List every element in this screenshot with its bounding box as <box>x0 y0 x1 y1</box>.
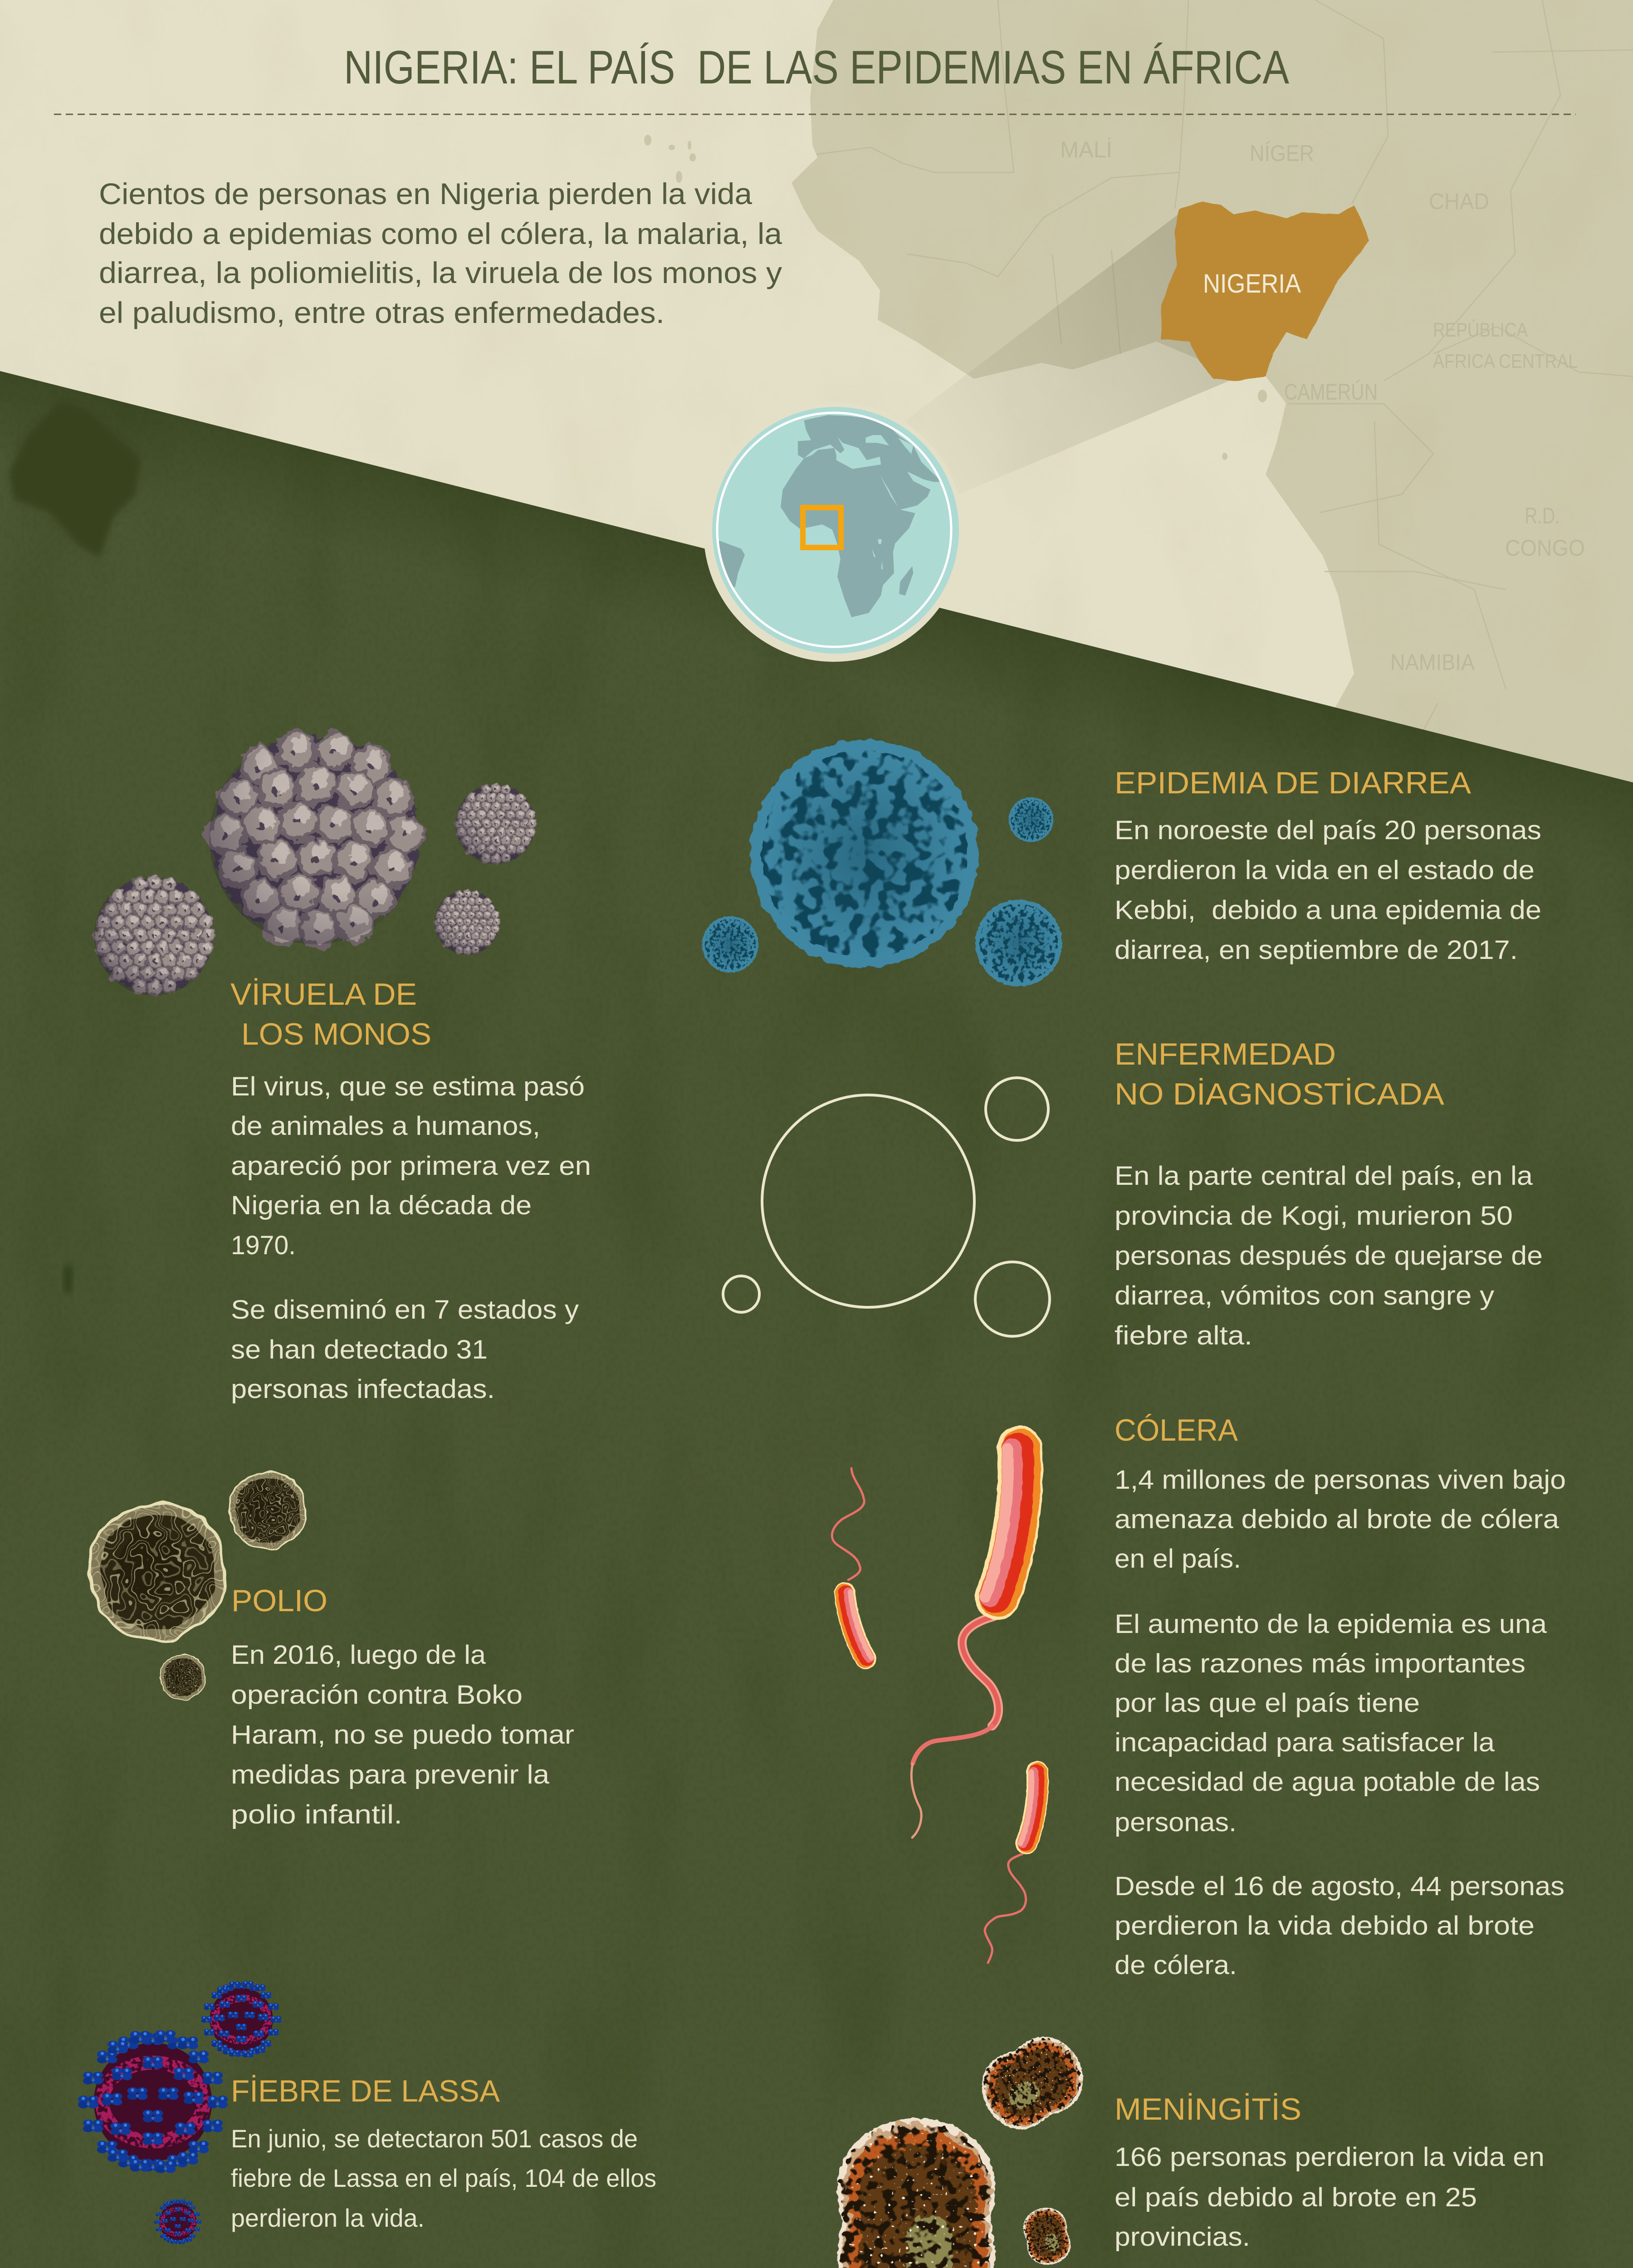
body text: Haram, no se puedo tomar <box>231 1720 574 1750</box>
body text: necesidad de agua potable de las <box>1115 1767 1540 1797</box>
body text: Kebbi, debido a una epidemia de <box>1115 895 1541 925</box>
body text: de cólera. <box>1115 1950 1237 1980</box>
heading: VİRUELA DE <box>230 977 417 1012</box>
map: Nigeria highlighted: NIGERIA <box>1203 269 1301 298</box>
large bacterium <box>911 1449 1021 1838</box>
body text: incapacidad para satisfacer la <box>1115 1728 1495 1757</box>
globe landmasses <box>711 415 942 617</box>
body text: de las razones más importantes <box>1115 1649 1525 1678</box>
heading: POLIO <box>231 1584 328 1618</box>
body text: 166 personas perdieron la vida en <box>1115 2142 1545 2172</box>
body text <box>231 1072 591 1404</box>
map country labels: R.D. <box>1525 503 1560 528</box>
map country labels: ÁFRICA CENTRAL <box>1433 350 1578 372</box>
body text: diarrea, vómitos con sangre y <box>1115 1281 1494 1310</box>
heading: LOS MONOS <box>241 1017 431 1051</box>
body text: provincias. <box>1115 2222 1250 2252</box>
heading <box>230 977 431 1051</box>
body text: operación contra Boko <box>231 1680 523 1710</box>
body text: apareció por primera vez en <box>231 1151 591 1181</box>
map: West and Central Africa land <box>644 0 1633 792</box>
body text: se han detectado 31 <box>231 1335 488 1364</box>
body text: Desde el 16 de agosto, 44 personas <box>1115 1872 1565 1901</box>
body text: perdieron la vida. <box>231 2204 425 2232</box>
intro text: debido a epidemias como el cólera, la malaria, la <box>99 217 782 250</box>
background: cream paper <box>0 0 1633 816</box>
intro text <box>99 177 782 329</box>
panel: enfermedad no diagnosticada <box>1115 1037 1543 1350</box>
body text <box>1115 816 1541 965</box>
body text: de animales a humanos, <box>231 1111 540 1141</box>
heading: MENİNGİTİS <box>1115 2092 1301 2126</box>
body text <box>1115 1161 1543 1350</box>
body text: 1,4 millones de personas viven bajo <box>1115 1465 1566 1495</box>
panel: meningitis <box>1115 2092 1562 2268</box>
left bacterium <box>832 1468 871 1660</box>
icon: polio viruses <box>88 1471 307 1700</box>
heading: EPIDEMIA DE DIARREA <box>1115 766 1472 800</box>
intro text: el paludismo, entre otras enfermedades. <box>99 296 665 329</box>
icon: undiagnosed outline circles <box>723 1078 1050 1336</box>
body text: El aumento de la epidemia es una <box>1115 1609 1547 1639</box>
locator beam from globe to Nigeria <box>906 211 1229 497</box>
body text: En la parte central del país, en la <box>1115 1161 1533 1191</box>
lower bacterium <box>985 1772 1038 1963</box>
body text: Nigeria en la década de <box>231 1191 532 1220</box>
map country labels: MALİ <box>1060 137 1112 162</box>
body text: perdieron la vida debido al brote <box>1115 1911 1535 1941</box>
body text: provincia de Kogi, murieron 50 <box>1115 1201 1513 1231</box>
body text: personas después de quejarse de <box>1115 1241 1543 1271</box>
map country labels: CAMERÚN <box>1284 379 1378 405</box>
map country labels: REPÚBLICA <box>1433 319 1528 341</box>
map: Nigeria highlighted <box>1161 201 1369 381</box>
icon: meningitis bacteria <box>837 2024 1096 2268</box>
body text: diarrea, en septiembre de 2017. <box>1115 935 1518 965</box>
map country labels: NAMIBIA <box>1390 650 1475 675</box>
body text: En 2016, luego de la <box>231 1640 486 1670</box>
panel: fiebre de lassa <box>231 2074 657 2268</box>
panel: polio <box>231 1584 574 1829</box>
body text <box>231 2124 657 2268</box>
title divider <box>54 113 1576 115</box>
body text: 1970. <box>231 1231 296 1260</box>
body text: personas. <box>1115 1808 1237 1837</box>
body text: Se diseminó en 7 estados y <box>231 1295 579 1325</box>
icon: lassa viruses <box>78 1981 281 2244</box>
heading: ENFERMEDAD <box>1115 1037 1336 1071</box>
heading: FİEBRE DE LASSA <box>231 2074 500 2108</box>
panel: cólera <box>1115 1413 1566 1980</box>
body text: personas infectadas. <box>231 1374 495 1404</box>
body text: En noroeste del país 20 personas <box>1115 816 1541 845</box>
panel: viruela de los monos <box>230 977 591 1404</box>
intro text: Cientos de personas en Nigeria pierden la vida <box>99 177 752 210</box>
body text: fiebre de Lassa en el país, 104 de ellos <box>231 2164 656 2192</box>
body text: En junio, se detectaron 501 casos de <box>231 2124 638 2153</box>
body text <box>1115 2142 1562 2268</box>
body text: en el país. <box>1115 1544 1241 1574</box>
body text: perdieron la vida en el estado de <box>1115 855 1535 885</box>
map country labels <box>1060 137 1585 675</box>
icon: monkeypox viruses <box>93 730 537 996</box>
panel: epidemia de diarrea <box>1115 766 1541 965</box>
icon: diarrhea viruses <box>703 744 1061 985</box>
background texture: paper stains <box>0 0 1633 785</box>
body text: medidas para prevenir la <box>231 1760 550 1789</box>
body text: el país debido al brote en 25 <box>1115 2183 1477 2212</box>
body text <box>231 1640 574 1829</box>
heading: NO DİAGNOSTİCADA <box>1115 1077 1445 1111</box>
body text: fiebre alta. <box>1115 1321 1252 1350</box>
map country labels: CONGO <box>1505 535 1585 561</box>
heading <box>1115 1037 1445 1111</box>
locator rectangle <box>803 508 841 547</box>
intro text: diarrea, la poliomielitis, la viruela de los monos y <box>99 256 782 289</box>
title: NIGERIA: EL PAÍS DE LAS EPIDEMIAS EN ÁFRICA <box>344 41 1290 94</box>
body text: por las que el país tiene <box>1115 1688 1420 1718</box>
heading: CÓLERA <box>1115 1413 1238 1447</box>
body text: polio infantil. <box>231 1800 402 1829</box>
body text: El virus, que se estima pasó <box>231 1072 585 1101</box>
body text: amenaza debido al brote de cólera <box>1115 1505 1560 1534</box>
icon: cholera bacteria <box>832 1449 1038 1963</box>
globe locator <box>704 401 964 662</box>
map country labels: NÍGER <box>1250 141 1314 166</box>
map country labels: CHAD <box>1429 189 1489 214</box>
body text <box>1115 1465 1566 1980</box>
